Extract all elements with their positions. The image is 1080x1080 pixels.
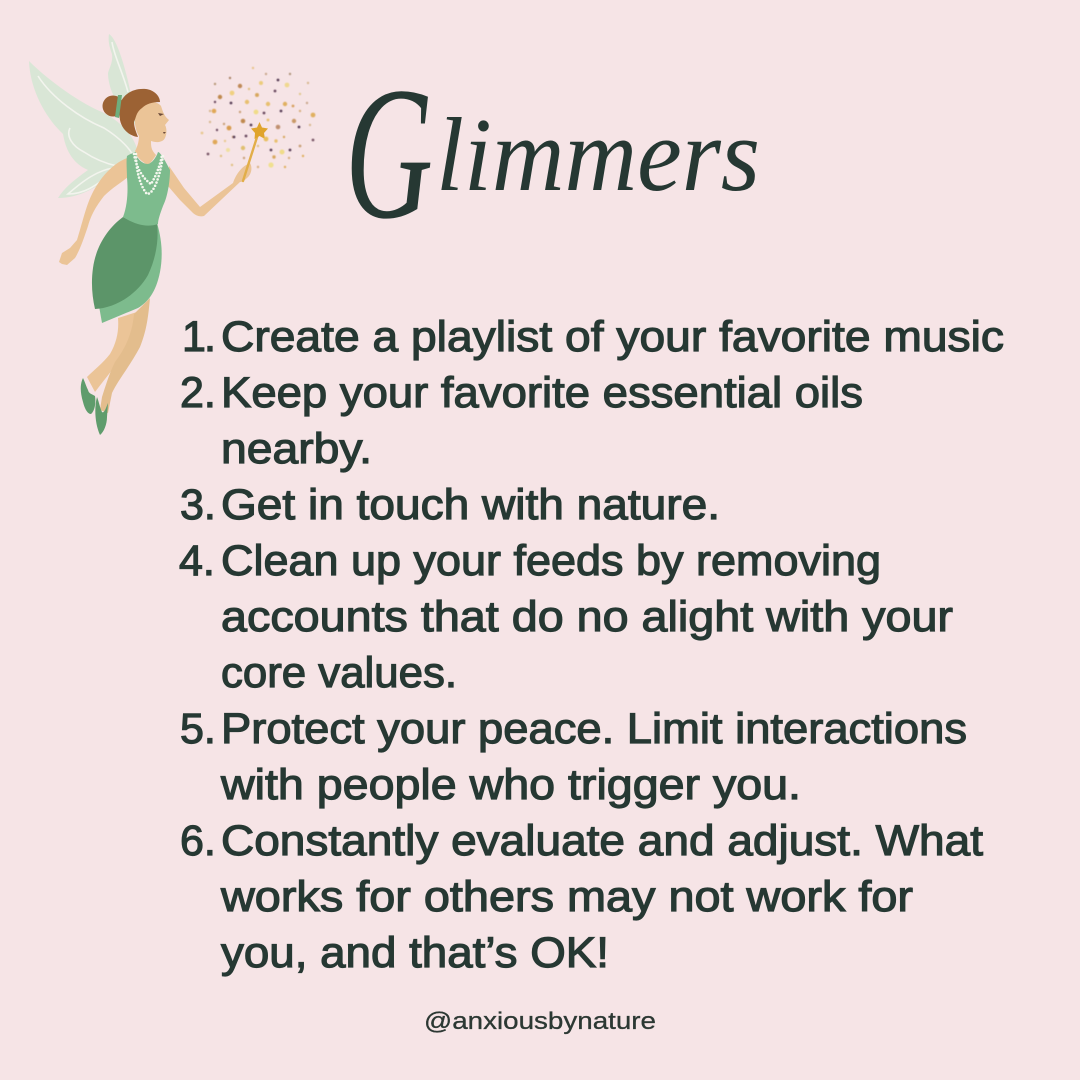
list item 2: Keep your favorite essential oils [221, 369, 863, 417]
fairy skirt front layer [92, 217, 158, 309]
list item 1: 1. [182, 313, 216, 361]
fairy face details [158, 113, 166, 134]
fairy neck and head [135, 102, 169, 165]
fairy wings [29, 34, 139, 198]
fairy shoes [81, 378, 108, 435]
sparkles [201, 67, 315, 168]
numbered list of glimmers [179, 313, 1004, 977]
list item 4: core values. [221, 649, 457, 697]
list item 3: Get in touch with nature. [221, 481, 720, 529]
list item 5: 5. [180, 705, 216, 753]
list item 5 [180, 705, 967, 809]
list item 2 [180, 369, 863, 473]
list item 3: 3. [180, 481, 216, 529]
list item 2: nearby. [221, 425, 372, 473]
wand [243, 134, 258, 181]
list item 4: accounts that do no alight with your [221, 593, 953, 641]
list item 6: you, and that’s OK! [221, 929, 609, 977]
list item 6: works for others may not work for [220, 873, 913, 921]
list item 2: 2. [180, 369, 216, 417]
fairy front leg [87, 312, 137, 392]
fairy bodice [123, 152, 170, 226]
list item 6: 6. [180, 817, 216, 865]
title: limmers [436, 96, 760, 213]
fairy pearl necklace [134, 154, 163, 194]
title: G [345, 49, 433, 259]
illustration: fairy with wand [29, 34, 315, 435]
title [345, 49, 760, 259]
list item 5: with people who trigger you. [220, 761, 801, 809]
list item 1: Create a playlist of your favorite music [221, 313, 1004, 361]
list item 4: Clean up your feeds by removing [221, 537, 881, 585]
fairy skirt back layer [99, 223, 162, 323]
social handle: @anxiousbynature [424, 1008, 656, 1035]
fairy right arm and hand [168, 163, 251, 216]
fairy left arm [59, 158, 128, 265]
list item 6: Constantly evaluate and adjust. What [221, 817, 983, 865]
fairy back leg [100, 298, 150, 413]
list item 4 [179, 537, 953, 697]
wand star [251, 122, 268, 139]
list item 5: Protect your peace. Limit interactions [221, 705, 967, 753]
list item 4: 4. [179, 537, 215, 585]
fairy hair [102, 89, 160, 137]
list item 6 [180, 817, 983, 977]
